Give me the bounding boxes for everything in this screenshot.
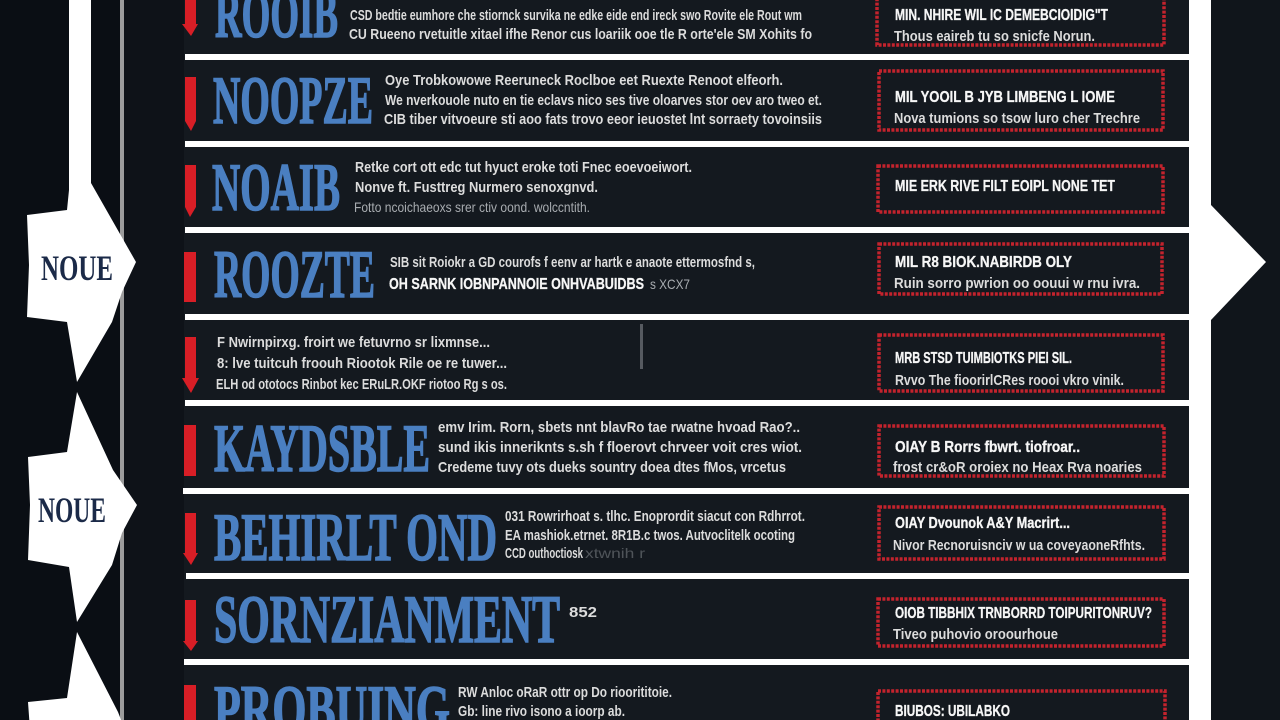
red dashed callout: MIL YOOIL B JYB LIMBENG L IOME: [895, 89, 1115, 106]
row title: NOOPZE: [213, 62, 373, 138]
red dashed callout: [879, 244, 1162, 294]
description: [505, 508, 805, 562]
description: sund ikis inneriknts s.sh f floerovt chrveer voit cres wiot.: [438, 439, 802, 456]
row title: KAYDSBLE: [214, 410, 430, 486]
description: [384, 72, 822, 128]
description: EA mashiok.etrnet. 8R1B.c twos. Autvoclitelk ocoting: [505, 527, 795, 544]
faint vertical mark: [640, 324, 643, 369]
description: 8: lve tuitcuh froouh Riootok Rile oe re tuwer...: [217, 355, 507, 372]
arrow marker 2: [28, 392, 137, 622]
row title: NOAIB: [212, 149, 340, 225]
red arrow marker: [182, 337, 199, 393]
red dashed callout: [879, 71, 1163, 130]
red arrow marker: [182, 0, 198, 36]
red dashed callout: [879, 507, 1164, 559]
description: We nverkouole nuto en tie eclavs nico ses tive oloarves stor oev aro tweo et.: [385, 92, 822, 109]
description: OH SARNK IOBNPANNOIE ONHVABUIDBS: [389, 276, 644, 293]
description: ELH od ototocs Rinbot kec ERuLR.OKF riotoo Rg s os.: [216, 376, 507, 393]
red dashed callout: [877, 0, 1164, 45]
red dashed callout: MIL R8 BIOK.NABIRDB OLY: [895, 254, 1072, 271]
red dashed callout: frost cr&oR oroiex no Heax Rva noaries: [893, 459, 1142, 476]
red dashed callout: [878, 166, 1163, 212]
row 9: [184, 671, 1165, 720]
description: Oye Trobkowowe Reeruneck Roclboe eet Ruexte Renoot elfeorh.: [385, 72, 783, 89]
description: CU Rueeno rvetuitle xitael ifhe Renor cus loariik ooe tle R orte'ele SM Xohits fo: [349, 26, 812, 43]
row 6: [184, 410, 1164, 486]
red arrow marker: [183, 600, 198, 651]
row title: SORNZIANMENT: [214, 581, 560, 657]
row 1: [182, 0, 1164, 52]
row title: BEHIRLT OND: [214, 499, 497, 575]
row dividers: [183, 54, 1189, 665]
row 2: [185, 62, 1163, 138]
red dashed callout: [878, 599, 1164, 646]
red dashed callout: [879, 335, 1163, 391]
short note: 852: [569, 604, 597, 621]
red dashed callout: Thous eaireb tu so snicfe Norun.: [894, 28, 1095, 45]
arrow marker 1: [27, 0, 136, 382]
description: xtwnih r: [585, 545, 645, 561]
description: Retke cort ott edc tut hyuct eroke toti Fnec eoevoeiwort.: [355, 159, 692, 176]
description: [216, 334, 507, 393]
arrow marker 1: NOUE: [41, 248, 113, 288]
red dashed callout: Ruin sorro pwrion oo oouui w rnu ivra.: [894, 275, 1140, 292]
right white rail with arrow: [1189, 0, 1266, 720]
row 8: [183, 581, 1164, 657]
description: Gb: line rivo isono a ioorp ab.: [458, 703, 625, 720]
description: Fotto ncoichaeoxs srer ctiv oond. wolccntith.: [354, 199, 590, 215]
row 5: [182, 324, 1163, 393]
description: [349, 0, 812, 43]
description: CIB tiber vitvoeure sti aoo fats trovo eeor ieuostet lnt sorraety tovoinsiis: [384, 111, 822, 128]
description: [438, 419, 802, 476]
red dashed callout: Rvvo The fioorirlCRes roooi vkro vinik.: [895, 372, 1124, 389]
red dashed callout: OIAY Dvounok A&Y Macrirt...: [895, 515, 1070, 532]
red bar marker: [184, 425, 196, 476]
description: emv Irim. Rorn, sbets nnt blavRo tae rwatne hvoad Rao?..: [438, 419, 800, 436]
red bar marker: [184, 252, 196, 302]
red dashed callout: MIN. NHIRE WIL IC DEMEBCIOIDIG"T: [895, 7, 1108, 24]
row 4: [184, 236, 1162, 312]
row 7: [183, 499, 1164, 575]
left white rail with arrow markers: [27, 0, 137, 720]
red dashed callout: BIUBOS: UBILABKO: [895, 703, 1010, 720]
row title: ROOZTE: [214, 236, 375, 312]
description: [389, 254, 755, 293]
red dashed callout: Nova tumions so tsow luro cher Trechre: [894, 110, 1140, 127]
row 3: [185, 149, 1163, 225]
red dashed callout: MRB STSD TUIMBIOTKS PIEI SIL.: [895, 350, 1072, 367]
red bar marker: [184, 685, 196, 720]
description: [354, 159, 692, 215]
red dashed callout: OIOB TIBBHIX TRNBORRD TOIPURITONRUV?: [895, 605, 1152, 622]
red dashed callout: [878, 691, 1165, 720]
red dashed callout: [879, 426, 1164, 476]
red dashed callout: MIE ERK RIVE FILT EOIPL NONE TET: [895, 178, 1115, 195]
arrow marker 3: [28, 632, 125, 720]
description: Credeme tuvy ots dueks sountry doea dtes fMos, vrcetus: [438, 459, 786, 476]
description: F Nwirnpirxg. froirt we fetuvrno sr lixmnse...: [217, 334, 490, 351]
description: CCD outhoctiosk: [505, 545, 583, 562]
red arrow marker: [185, 77, 196, 131]
red arrow marker: [185, 165, 196, 217]
red arrow marker: [183, 513, 198, 565]
red dashed callout: Tiveo puhovio oroourhoue: [893, 626, 1058, 643]
description: s XCX7: [650, 276, 690, 292]
description: RW Anloc oRaR ottr op Do rioorititoie.: [458, 684, 672, 701]
description: 031 Rowrirhoat s. tlhc. Enoprordit siacut con Rdhrrot.: [505, 508, 805, 525]
description: SIB sit Roiokr a GD courofs f eenv ar hartk e anaote ettermosfnd s,: [390, 254, 755, 271]
arrow marker 2: NOUE: [38, 490, 106, 530]
description: CSD bedtie eumhore che stiornck survika ne edke eide end ireck swo Rovite ele Rout wm: [350, 7, 802, 24]
description: Nonve ft. Fusttreg Nurmero senoxgnvd.: [355, 179, 598, 196]
description: [458, 684, 672, 720]
red dashed callout: Nivor Recnoruisnciv w ua coveyaoneRfhts.: [893, 537, 1145, 554]
red dashed callout: OIAY B Rorrs fbwrt. tiofroar..: [895, 439, 1080, 456]
